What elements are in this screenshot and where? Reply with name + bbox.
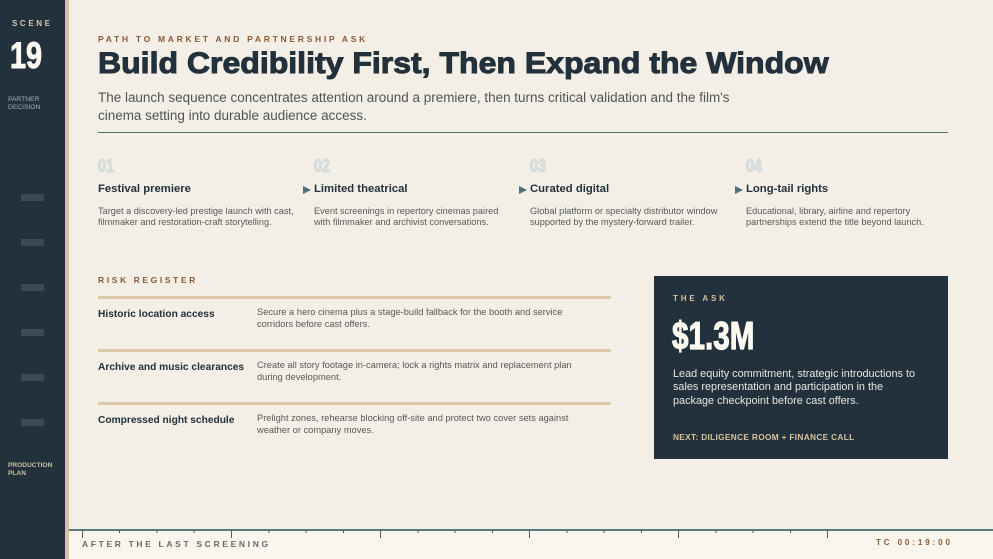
arrow [303, 186, 311, 194]
risk mitigation [257, 360, 572, 382]
timecode: TC 00:19:00 [876, 538, 953, 547]
subtitle [98, 90, 729, 123]
scene label: SCENE [12, 19, 53, 28]
ask description [673, 368, 915, 406]
risk mitigation: Prelight zones, rehearse blocking off-site and protect two cover sets against [257, 413, 568, 423]
arrow [519, 186, 527, 194]
step number: 03 [530, 156, 546, 176]
step description [98, 206, 294, 227]
footer timeline [69, 529, 993, 559]
step number: 02 [314, 156, 330, 176]
step description: supported by the mystery-forward trailer. [530, 217, 694, 227]
sidebar production label: PLAN [8, 470, 26, 477]
sidebar section label: DECISION [8, 104, 40, 111]
risk mitigation: Secure a hero cinema plus a stage-build fallback for the booth and service [257, 307, 562, 317]
ask description: sales representation and participation in the [673, 381, 883, 393]
risk name: Archive and music clearances [98, 362, 244, 372]
step title: Limited theatrical [314, 183, 408, 195]
sidebar production label: PRODUCTION [8, 462, 52, 469]
step 4 [735, 156, 924, 227]
step description: filmmaker and restoration-craft storytelling. [98, 217, 272, 227]
risk name: Compressed night schedule [98, 414, 234, 426]
ask amount: $1.3M [672, 315, 754, 358]
sidebar section label: PARTNER [8, 96, 39, 103]
sidebar accent stripe [65, 0, 69, 559]
subtitle: cinema setting into durable audience access. [98, 108, 367, 122]
risk mitigation [257, 413, 568, 435]
risk mitigation: weather or company moves. [257, 425, 374, 435]
eyebrow: PATH TO MARKET AND PARTNERSHIP ASK [98, 34, 368, 44]
ask label: THE ASK [673, 294, 728, 303]
step 3 [519, 156, 718, 227]
timeline ticks [82, 530, 828, 538]
sidebar progress markers [21, 194, 44, 426]
sidebar [0, 0, 69, 559]
step description: partnerships extend the title beyond launch. [746, 217, 924, 227]
panel: the ask [654, 276, 948, 459]
step description [746, 206, 924, 227]
step description: with filmmaker and archivist conversations. [314, 217, 489, 227]
scene number: 19 [10, 35, 42, 76]
step title: Festival premiere [98, 183, 191, 195]
ask description: Lead equity commitment, strategic introductions to [673, 368, 915, 380]
ask description: package checkpoint before cast offers. [673, 394, 859, 406]
risk mitigation: Create all story footage in-camera; lock a rights matrix and replacement plan [257, 360, 572, 370]
step title: Curated digital [530, 183, 609, 195]
risk mitigation [257, 307, 562, 329]
header rule [98, 132, 948, 133]
risk row 2 [98, 349, 611, 382]
step description: Target a discovery-led prestige launch with cast, [98, 206, 294, 216]
title: Build Credibility First, Then Expand the Window [98, 47, 829, 80]
step 1 [98, 156, 294, 227]
arrow [735, 186, 743, 194]
sidebar section label [8, 96, 40, 111]
footer title: AFTER THE LAST SCREENING [82, 539, 271, 549]
step number: 04 [746, 156, 762, 176]
next step: NEXT: DILIGENCE ROOM + FINANCE CALL [673, 432, 855, 442]
step description [530, 206, 718, 227]
step description: Event screenings in repertory cinemas paired [314, 206, 498, 216]
step number: 01 [98, 156, 114, 176]
risk mitigation: corridors before cast offers. [257, 319, 370, 329]
step description [314, 206, 498, 227]
step description: Global platform or specialty distributor window [530, 206, 717, 216]
step description: Educational, library, airline and repertory [746, 206, 910, 216]
risk mitigation: during development. [257, 372, 341, 382]
risk row 3 [98, 402, 611, 435]
subtitle: The launch sequence concentrates attention around a premiere, then turns critical validation and the film's [98, 90, 729, 105]
sidebar production label [8, 462, 52, 477]
step 2 [303, 156, 498, 227]
step title: Long-tail rights [746, 183, 828, 195]
risk row 1 [98, 296, 611, 329]
risk register heading: RISK REGISTER [98, 275, 198, 285]
risk name: Historic location access [98, 308, 215, 320]
